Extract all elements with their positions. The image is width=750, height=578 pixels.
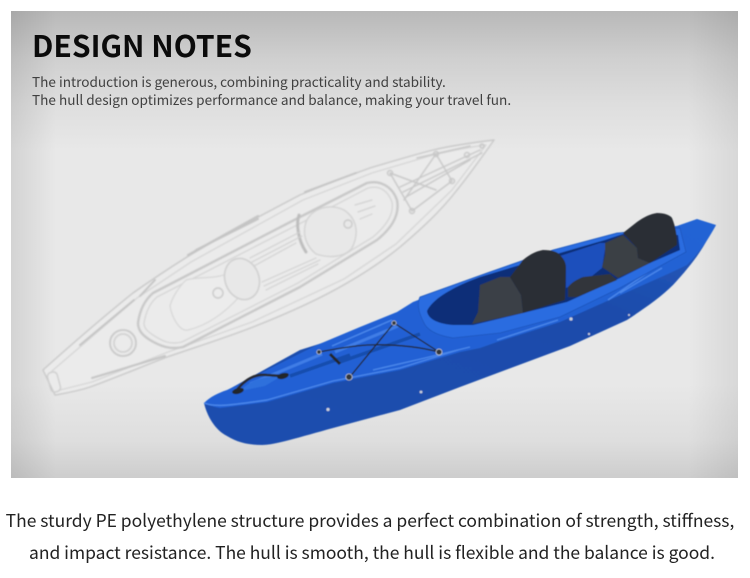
illustration: transparent kayak sketch bbox=[43, 140, 494, 395]
sketch stern grip bbox=[47, 371, 61, 393]
hull rivets bbox=[326, 314, 630, 411]
sketch bow bungee cords bbox=[388, 144, 484, 214]
carry handle bbox=[231, 372, 290, 395]
caption line one: The sturdy PE polyethylene structure provides a perfect combination of strength, stiffness, bbox=[6, 508, 734, 533]
front seat base bbox=[472, 277, 523, 324]
kayak deck bbox=[204, 219, 716, 408]
rear seat back bbox=[623, 213, 677, 263]
sketch floor ribs bbox=[250, 200, 375, 290]
caption line two: and impact resistance. The hull is smooth, the hull is flexible and the balance is good. bbox=[29, 540, 715, 565]
sketch drain circles bbox=[213, 220, 352, 298]
sketch cockpit inner line bbox=[144, 187, 392, 343]
sketch side rails bbox=[80, 173, 356, 378]
kayak hull side bbox=[204, 225, 716, 445]
kayak cockpit back wall bbox=[560, 243, 606, 288]
intro text line one: The introduction is generous, combining practicality and stability. bbox=[32, 71, 446, 91]
front seat back bbox=[510, 250, 566, 313]
sketch rear seat back bbox=[219, 253, 265, 305]
rear seat base bbox=[602, 235, 650, 278]
sketch front seat back bbox=[304, 207, 356, 256]
deck fittings bbox=[317, 321, 442, 380]
heading: DESIGN NOTES bbox=[32, 22, 252, 66]
kayak cockpit opening bbox=[427, 234, 680, 325]
panel: grey backdrop bbox=[11, 11, 738, 478]
front seat bbox=[472, 250, 566, 324]
kayak deck highlight bbox=[204, 264, 662, 405]
sketch front seat strap bbox=[298, 215, 306, 252]
sketch hatch ring bbox=[110, 330, 136, 356]
sketch inner gunwale line bbox=[52, 145, 486, 390]
rear seat cushion bbox=[568, 274, 617, 297]
sketch rear seat pan bbox=[170, 272, 240, 330]
sketch cockpit rim bbox=[138, 182, 398, 348]
blue kayak bbox=[204, 213, 716, 445]
kayak front deck channel bbox=[290, 334, 420, 376]
sketch hull outline bbox=[43, 140, 494, 395]
rear seat bbox=[568, 213, 677, 297]
bungee cords bbox=[319, 323, 439, 378]
kayak cockpit rim bbox=[418, 228, 686, 338]
intro text line two: The hull design optimizes performance and balance, making your travel fun. bbox=[32, 89, 511, 109]
